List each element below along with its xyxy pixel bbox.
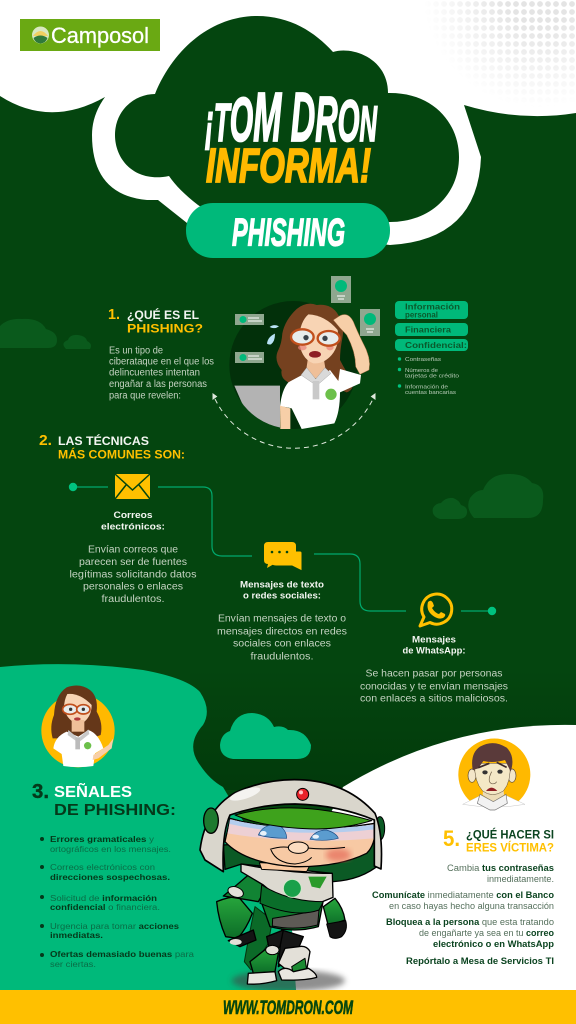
eyes	[482, 770, 503, 774]
polo	[53, 730, 103, 767]
heading line 1: SEÑALES	[54, 783, 132, 801]
neck	[259, 863, 310, 872]
whatsapp body	[360, 668, 508, 704]
front foot	[247, 972, 277, 984]
step 2: en caso hayas hecho alguna transacción	[389, 901, 554, 911]
messages title: Mensajes de texto	[240, 580, 325, 590]
avatar: man	[458, 739, 530, 810]
green cloud	[220, 713, 311, 759]
neck	[72, 720, 84, 732]
messages body: mensajes directos en redes	[217, 626, 347, 638]
title	[205, 78, 377, 193]
title cloud	[115, 16, 459, 240]
face	[475, 763, 510, 795]
nose	[288, 842, 308, 853]
whatsapp body: Se hacen pasar por personas	[366, 668, 502, 680]
email body	[70, 544, 196, 605]
email title: electrónicos:	[101, 522, 165, 532]
section 1 text: ciberataque en el que los	[109, 356, 214, 368]
hair	[51, 686, 101, 738]
title line 2: INFORMA!	[206, 140, 371, 193]
section 1 text: engañar a las personas	[109, 379, 207, 390]
pill: personal	[395, 301, 468, 320]
left ear	[204, 808, 218, 833]
pill: personal: personal	[405, 310, 438, 320]
helmet highlight	[228, 785, 262, 803]
torso	[260, 898, 323, 930]
heading line 2: ERES VÍCTIMA?	[466, 840, 554, 854]
step 2: Comunícate inmediatamente con el Banco	[372, 890, 555, 900]
mouth	[486, 788, 497, 791]
email title: Correos	[114, 510, 152, 520]
email title	[101, 510, 165, 532]
messages body: sociales con enlaces	[233, 638, 331, 650]
messages title: o redes sociales:	[243, 590, 321, 600]
goggle band	[228, 819, 375, 841]
chat dots	[271, 551, 288, 553]
blush	[298, 345, 334, 350]
eyebrows	[478, 762, 507, 768]
heading line 2: PHISHING?	[127, 324, 203, 336]
laptop	[234, 386, 280, 428]
icon: chat bubbles	[264, 542, 302, 571]
heading line 2: DE PHISHING:	[54, 802, 176, 819]
pill label: PHISHING	[232, 212, 345, 254]
hair	[276, 304, 353, 392]
step 2	[372, 890, 555, 911]
heading line 1: ¿QUÉ ES EL	[127, 309, 199, 322]
right boot	[278, 946, 310, 970]
message 1	[235, 314, 264, 325]
whatsapp title: de WhatsApp:	[402, 646, 466, 656]
mouth	[309, 351, 321, 358]
section 3 heading	[32, 781, 176, 819]
dashed arrow arc	[213, 394, 375, 448]
bullet 2: Correos electrónicos con	[50, 862, 155, 872]
technique: text messages	[217, 580, 347, 662]
bullets: tarjetas de crédito	[405, 374, 459, 380]
step 3: Bloquea a la persona que esta tratando	[386, 917, 554, 927]
whatsapp title	[402, 634, 466, 656]
bullet 3: confidencial o financiera.	[50, 902, 160, 912]
dark circle	[229, 301, 357, 429]
bullets	[398, 357, 459, 396]
white panel	[290, 725, 576, 990]
heading line 1: LAS TÉCNICAS	[58, 435, 149, 448]
step 1	[447, 863, 554, 884]
whatsapp title: Mensajes	[412, 634, 456, 644]
card 2	[360, 309, 380, 336]
mouth	[74, 717, 81, 721]
section 1 heading	[108, 306, 203, 336]
icon: whatsapp	[420, 594, 452, 626]
email body: fraudulentos.	[102, 594, 164, 605]
whatsapp body: conocidas y te envían mensajes	[360, 682, 508, 692]
step 1: Cambia tus contraseñas	[447, 863, 554, 873]
connector end dots	[69, 483, 496, 615]
section 1 text: Es un tipo de	[109, 346, 163, 356]
bullet 5: Ofertas demasiado buenas para	[50, 949, 194, 959]
helmet shell	[200, 780, 382, 872]
bullets: cuentas bancarias	[405, 390, 456, 396]
top white header shape	[0, 0, 576, 245]
neck	[483, 787, 504, 802]
right hand	[327, 921, 346, 938]
badge	[325, 389, 337, 400]
messages body: Envían mensajes de texto o	[218, 614, 346, 624]
belly stripes	[272, 910, 319, 928]
messages body: fraudulentos.	[250, 652, 314, 662]
technique: whatsapp	[360, 634, 508, 704]
bullet 4	[40, 921, 179, 940]
right ear	[375, 817, 385, 840]
logo wordmark: Camposol	[51, 23, 149, 48]
badge	[283, 879, 301, 897]
shadow	[232, 970, 345, 991]
messages title	[240, 580, 325, 600]
glasses	[291, 329, 340, 346]
arm	[93, 738, 113, 760]
email body: Envían correos que	[88, 544, 178, 556]
right foot	[278, 968, 317, 980]
section 1 text	[109, 346, 214, 402]
collar	[477, 794, 507, 810]
chest green	[260, 885, 323, 913]
glasses line	[270, 847, 345, 849]
step 4: Repórtalo a Mesa de Servicios TI	[406, 956, 554, 966]
website: WWW.TOMDRON.COM	[223, 998, 354, 1019]
section 5 steps	[372, 863, 555, 966]
step 1: inmediatamente.	[487, 874, 554, 884]
bullet 5	[40, 949, 194, 969]
connector lines	[69, 483, 496, 615]
illustration: worried woman	[229, 301, 370, 429]
placket	[313, 381, 319, 399]
yellow circle	[41, 694, 115, 767]
number 2: 2.	[39, 432, 52, 449]
badge	[84, 742, 91, 749]
hair	[472, 743, 512, 772]
front leg	[244, 907, 272, 970]
heading line 1: ¿QUÉ HACER SI	[466, 826, 554, 842]
email body: personales o enlaces	[83, 582, 183, 592]
cheek	[326, 848, 351, 862]
back leg	[278, 930, 303, 967]
green panel	[0, 664, 296, 990]
bullet 3	[40, 893, 160, 912]
robot mascot	[200, 780, 385, 991]
number 1: 1.	[108, 306, 120, 323]
section 2 heading	[39, 432, 185, 462]
bullet 4: Urgencia para tomar acciones	[50, 921, 179, 931]
chest	[241, 864, 333, 904]
front boot	[250, 948, 278, 973]
heading line 2: MÁS COMUNES SON:	[58, 448, 185, 462]
bullet 2: direcciones sospechosas.	[50, 872, 170, 882]
neck	[305, 360, 327, 378]
technique: email	[70, 510, 196, 605]
step 3: electrónico o en WhatsApp	[433, 939, 555, 949]
step 3	[386, 917, 555, 949]
helmet under	[223, 835, 380, 882]
section 1 text: para que revelen:	[109, 390, 181, 402]
eyes	[69, 708, 85, 711]
collar	[68, 729, 89, 743]
sweat drops	[267, 325, 279, 345]
icon cards	[235, 276, 380, 363]
panel: information types	[395, 301, 468, 396]
bullet 4: inmediatas.	[50, 930, 103, 940]
bullet 1: ortográficos en los mensajes.	[50, 844, 171, 854]
raised arm	[333, 315, 370, 374]
email body: parecen ser de fuentes	[79, 557, 187, 568]
collar	[301, 368, 331, 386]
message 2	[235, 352, 264, 363]
card 1	[331, 276, 351, 303]
step 3: de engañarte ya sea en tu correo	[419, 928, 554, 938]
left hand	[228, 930, 256, 947]
email body: legítimas solicitando datos	[70, 570, 196, 580]
shoulder	[223, 875, 268, 902]
icon: logo emblem	[32, 26, 49, 44]
dot pattern	[450, 1, 575, 82]
pill: financial: Financiera	[405, 324, 451, 334]
phishing pill	[186, 203, 390, 258]
icon: envelope	[115, 474, 150, 499]
title line 1: ¡TOM DRON	[205, 78, 377, 156]
smile	[271, 850, 312, 864]
section 1 text: delincuentes intentan	[109, 368, 200, 378]
whatsapp body: con enlaces a sitios maliciosos.	[360, 694, 508, 704]
right arm	[323, 898, 345, 926]
bullet 3: Solicitud de información	[50, 893, 157, 903]
section 5 heading	[443, 826, 554, 854]
pupils	[260, 831, 319, 839]
bullet 2	[40, 862, 170, 882]
decorative clouds	[0, 319, 543, 519]
yellow circle	[458, 739, 530, 802]
messages body	[217, 614, 347, 662]
pill: confidential: Confidencial:	[405, 340, 467, 350]
eyes	[303, 335, 328, 341]
logo	[20, 19, 160, 51]
polo shirt	[280, 369, 361, 429]
pill: personal: Información	[405, 302, 460, 312]
bullets: Números de	[405, 368, 438, 374]
left arm	[280, 406, 290, 429]
arrow heads	[213, 394, 375, 399]
red light	[297, 788, 309, 800]
bullet 1	[40, 834, 171, 854]
bullet 5: ser ciertas.	[50, 959, 96, 969]
nose	[489, 772, 497, 784]
bullets: Información de	[405, 384, 448, 390]
face	[64, 694, 92, 725]
avatar: woman	[41, 686, 115, 767]
bullet 1: Errores gramaticales y	[50, 834, 155, 844]
left arm	[217, 897, 252, 938]
section 3 list	[40, 834, 194, 969]
eyes	[258, 825, 338, 840]
green visor	[235, 808, 372, 829]
number 3: 3.	[32, 781, 49, 803]
footer bar	[0, 990, 576, 1024]
face	[225, 818, 375, 867]
number 5: 5.	[443, 826, 460, 851]
face	[299, 314, 338, 363]
ears	[468, 769, 516, 782]
glasses	[63, 704, 90, 714]
bullets: Contraseñas	[405, 357, 441, 363]
placket	[75, 737, 80, 749]
shirt	[463, 796, 525, 806]
